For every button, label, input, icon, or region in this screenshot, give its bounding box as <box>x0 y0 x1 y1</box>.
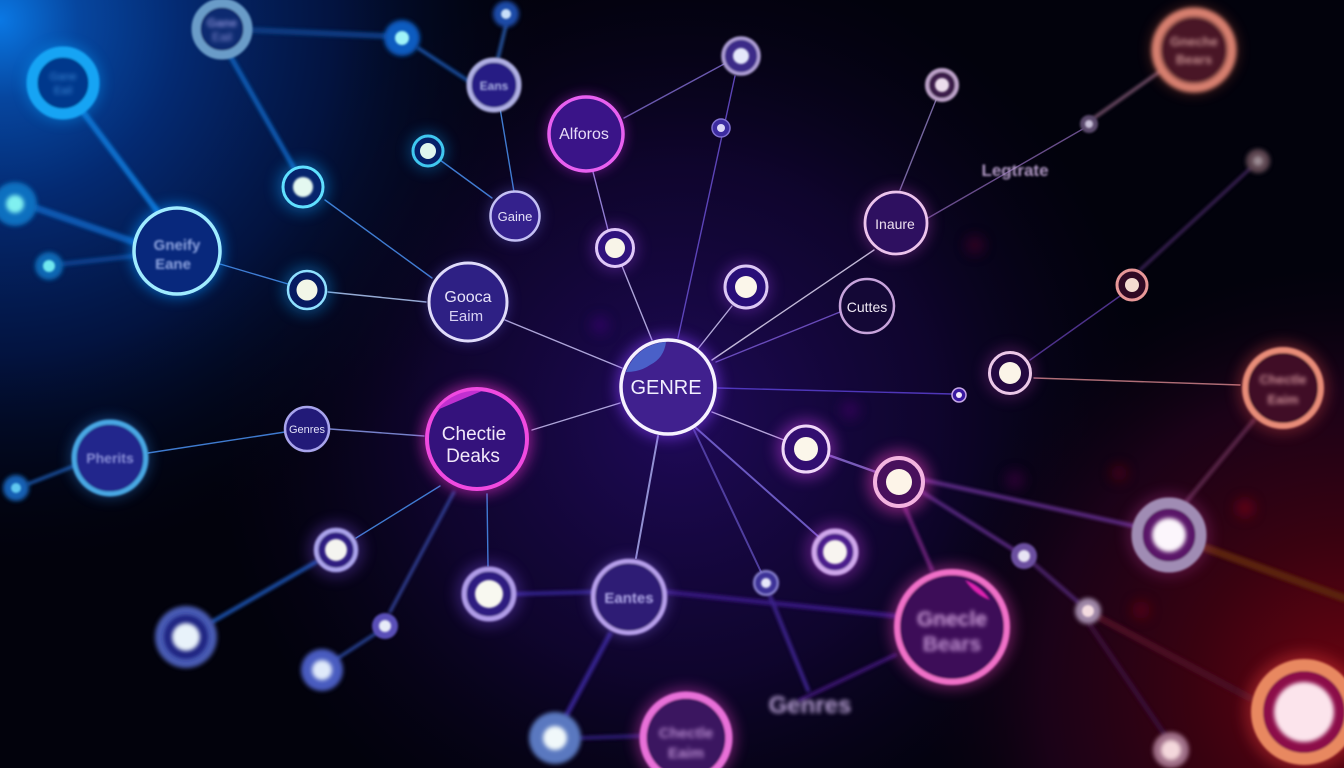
dot: mid bottom <box>456 561 522 627</box>
node: Chectle Eaim right <box>1237 342 1329 434</box>
dot: right small 2 <box>1075 598 1101 624</box>
node: Chectie Deaks <box>422 384 532 494</box>
node: Gneify Eane: Eane <box>155 256 191 273</box>
node: Insure <box>861 188 931 258</box>
node: top left cyan: Gane <box>50 71 76 83</box>
node: Gnecle Bears: Bears <box>923 633 981 656</box>
node: top blurred blue: Eail <box>212 30 232 44</box>
dot: tiny right top <box>1080 115 1098 133</box>
node: top left cyan <box>25 45 101 121</box>
dot: far right top <box>1246 149 1270 173</box>
dot: lower small <box>754 571 778 595</box>
dot: left bottom 1 <box>308 522 364 578</box>
node: top blurred blue: Gane <box>207 16 237 30</box>
dot: top small <box>493 1 519 27</box>
node: Gooca Eaim <box>428 262 508 342</box>
node: Gneify Eane <box>131 205 223 297</box>
node: Gaine: Gaine <box>498 209 532 224</box>
dot: right large <box>1127 493 1211 577</box>
dot: purple small <box>712 119 730 137</box>
node: Chectle bottom <box>636 688 736 768</box>
node: top right orange: Gneche <box>1170 34 1218 49</box>
node: top right orange: Bears <box>1176 52 1212 67</box>
dot: pink <box>867 450 931 514</box>
node: Insure: Inaure <box>875 216 915 232</box>
dot: left cyan <box>0 182 37 226</box>
dot: purple top <box>723 38 759 74</box>
node: Chectle Eaim right: Eaim <box>1267 392 1299 407</box>
dot: bottom blue <box>529 712 581 764</box>
dot: right of top <box>720 261 772 313</box>
dot: center right <box>984 347 1036 399</box>
dot: cyan top <box>384 20 420 56</box>
dot: blue 3 <box>408 131 448 171</box>
node: Gooca Eaim: Eaim <box>449 308 483 325</box>
node: Gnecle Bears: Gnecle <box>917 608 987 631</box>
node: Eans: Eans <box>480 79 509 93</box>
dot: left lower <box>3 475 29 501</box>
node: Genres small: Genres <box>289 424 326 436</box>
node: Chectie Deaks: Deaks <box>446 446 500 467</box>
node: Eans <box>469 60 519 110</box>
dot: small bottom <box>372 613 398 639</box>
node: Alforos: Alforos <box>559 126 609 143</box>
node: Gnecle Bears <box>890 565 1014 689</box>
sharp connecting lines <box>148 64 1240 574</box>
node: Eantes: Eantes <box>604 590 654 607</box>
dot: red <box>1117 270 1147 300</box>
label: Legtrate: Legtrate <box>981 161 1049 180</box>
node: Pherits <box>70 418 150 498</box>
dot: bottom right small <box>1153 732 1189 768</box>
dot: lower purple <box>805 522 865 582</box>
node: Cuttes: Cuttes <box>847 299 887 315</box>
dot: bottom right large <box>1244 652 1344 768</box>
label: Genres bottom: Genres <box>769 692 851 719</box>
dot: purple mid <box>591 224 639 272</box>
node: Gooca Eaim: Gooca <box>444 289 492 306</box>
node: Alforos <box>548 96 624 172</box>
dot: blue 1 <box>277 161 329 213</box>
node: GENRE central <box>616 335 720 439</box>
dot: right small 1 <box>1011 543 1037 569</box>
node: Chectle bottom: Chectle <box>659 725 713 742</box>
node: Cuttes <box>840 279 894 333</box>
node: Gneify Eane: Gneify <box>154 237 201 254</box>
dot: upper right <box>927 70 957 100</box>
node: top left cyan: Eail <box>54 85 72 97</box>
node: Genres small <box>285 407 329 451</box>
dot: left small <box>35 252 63 280</box>
node: GENRE central: GENRE <box>630 377 702 399</box>
node: Chectle bottom: Eaim <box>668 745 704 762</box>
node: Chectie Deaks: Chectie <box>442 424 506 445</box>
node: Gaine <box>489 190 541 242</box>
dot: below center <box>776 419 836 479</box>
node: Eantes <box>589 557 669 637</box>
node: top blurred blue <box>196 3 248 55</box>
node: Chectle Eaim right: Chectle <box>1260 372 1306 387</box>
dot: tiny center <box>952 388 966 402</box>
dot: blue 2 <box>282 265 332 315</box>
node: top right orange <box>1150 6 1238 94</box>
dot: left bottom 2 <box>155 606 217 668</box>
dot: lower left blue <box>301 649 343 691</box>
node: Pherits: Pherits <box>86 450 134 466</box>
